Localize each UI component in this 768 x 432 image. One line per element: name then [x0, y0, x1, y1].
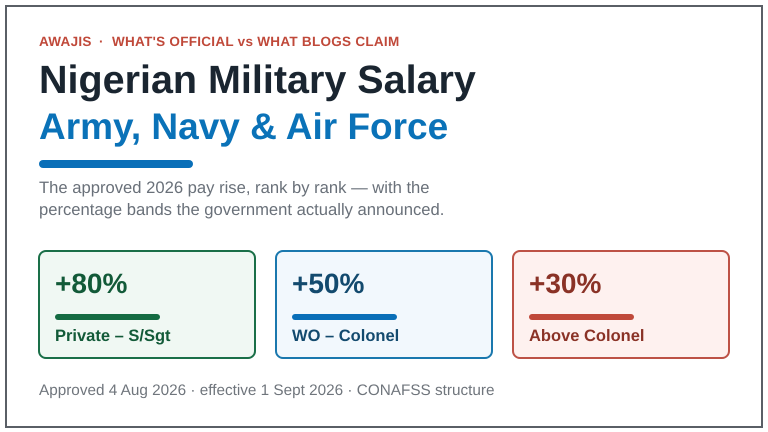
- band bar: [55, 314, 160, 320]
- percentage: +50%: [292, 268, 364, 299]
- card: +30%: [512, 250, 730, 359]
- rank label: Private – S/Sgt: [55, 327, 171, 345]
- card: +80%: [38, 250, 256, 359]
- card: +50%: [275, 250, 493, 359]
- band bar: [529, 314, 634, 320]
- subtitle: Army, Navy & Air Force: [39, 106, 448, 147]
- rank label: Above Colonel: [529, 327, 645, 345]
- description: The approved 2026 pay rise, rank by rank — with the: [39, 178, 430, 197]
- footnote: Approved 4 Aug 2026 · effective 1 Sept 2026 · CONAFSS structure: [39, 382, 494, 399]
- eyebrow: WHAT'S OFFICIAL vs WHAT BLOGS CLAIM: [112, 34, 400, 49]
- eyebrow: ·: [99, 34, 104, 49]
- band bar: [292, 314, 397, 320]
- description: percentage bands the government actually announced.: [39, 200, 444, 219]
- description: [39, 178, 444, 219]
- percentage: +30%: [529, 268, 601, 299]
- eyebrow: AWAJIS: [39, 34, 92, 49]
- title: Nigerian Military Salary: [39, 58, 476, 102]
- accent bar: [39, 160, 193, 168]
- rank label: WO – Colonel: [292, 327, 399, 345]
- percentage: +80%: [55, 268, 127, 299]
